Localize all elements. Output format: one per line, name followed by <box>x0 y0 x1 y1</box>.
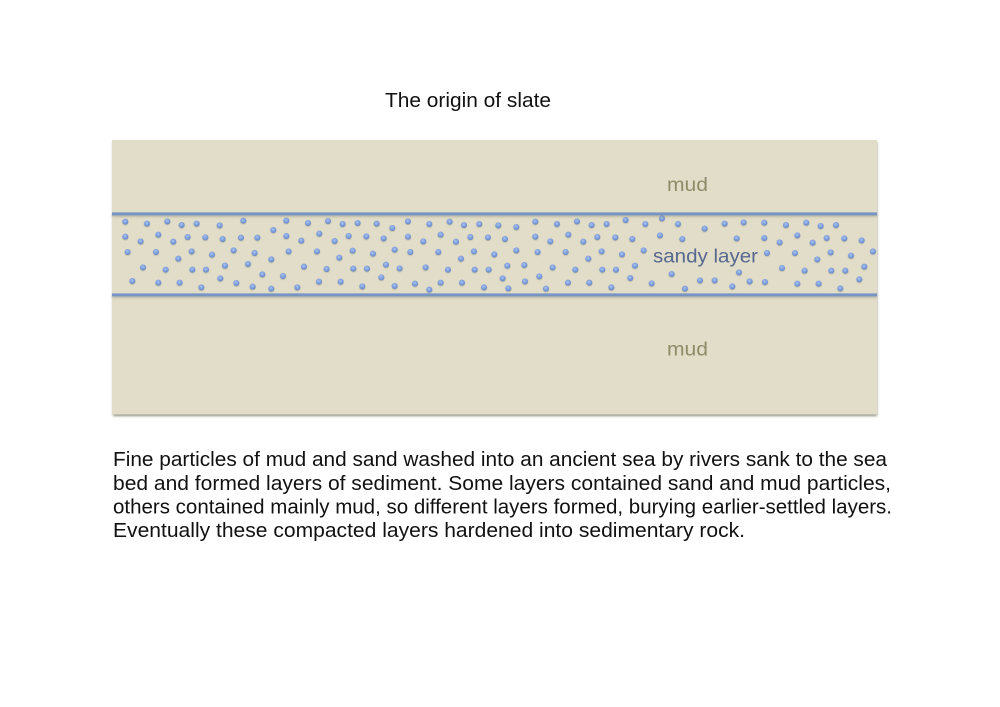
text block: description <box>113 449 892 542</box>
title: The origin of slate <box>385 89 551 112</box>
text block: description: bed and formed layers of sediment. Some layers contained sand and mud particles, <box>113 473 891 495</box>
panel: sediment layers <box>112 140 877 416</box>
upper boundary line of sandy layer <box>112 212 877 215</box>
lower boundary line of sandy layer <box>112 293 877 296</box>
text block: description: Eventually these compacted layers hardened into sedimentary rock. <box>113 520 745 542</box>
panel background <box>112 140 877 414</box>
panel shadow <box>113 142 877 416</box>
label: sandy layer: sandy layer <box>653 246 759 268</box>
particles: sand grains <box>122 215 876 293</box>
text block: description: Fine particles of mud and sand washed into an ancient sea by rivers sank to the sea <box>113 449 888 471</box>
label: bottom mud: mud <box>667 340 708 360</box>
text block: description: others contained mainly mud, so different layers formed, burying earlier-settled layers. <box>113 496 892 518</box>
label: top mud: mud <box>667 175 708 196</box>
